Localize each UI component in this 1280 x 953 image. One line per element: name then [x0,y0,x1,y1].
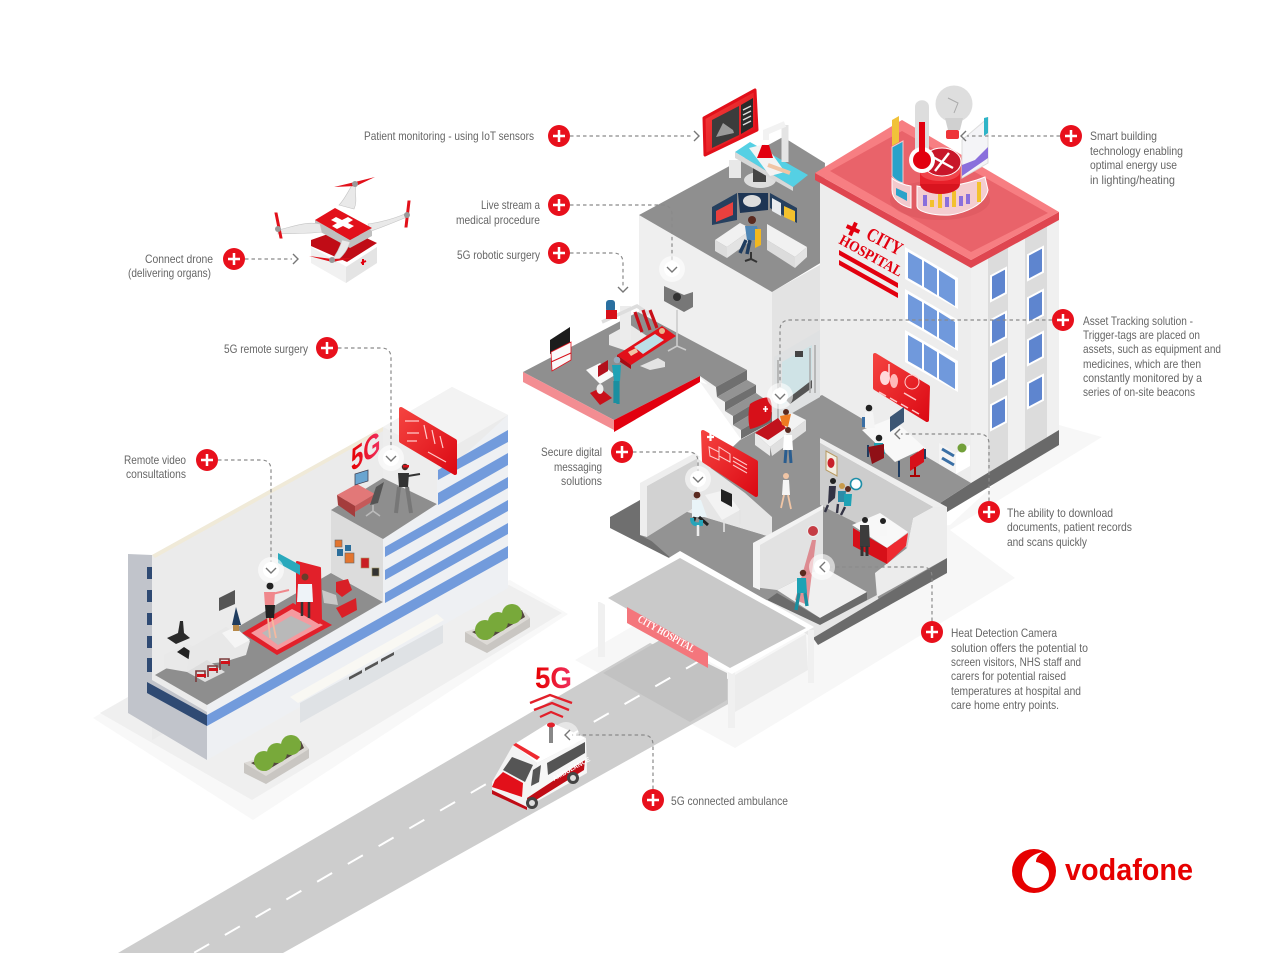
rooftop smart building display [890,100,990,220]
ambulance lettering: AMBULANCE [552,756,592,783]
reception desk [852,513,908,564]
5G ambulance signal: 5G [535,662,572,695]
monitor on stand [664,286,693,351]
callout: smart building: Smart building [1090,130,1157,143]
facade with blue stripes [207,415,508,760]
doctor by the bed [783,427,793,463]
monitoring tablet [704,90,757,155]
hospital name: CITY [863,224,906,260]
messaging doctor [692,492,708,536]
desk and chair [337,470,384,517]
hospital name: HOSPITAL [836,233,905,280]
white cross [331,217,354,229]
waiting patients [825,478,852,515]
left end wall [128,554,207,760]
operating lamp and console [602,300,657,352]
receptionist and visitor [860,517,887,556]
callout: asset tracking: constantly monitored by a [1083,372,1202,385]
potted plant [232,607,241,631]
antenna [549,726,553,743]
callout: remote surgery [224,337,404,471]
red chair [910,448,924,476]
hospital tower block [639,137,825,445]
canopy legs [598,602,814,728]
callout: connect drone [128,248,298,280]
left face windows [905,247,958,392]
callout: heat detection: screen visitors, NHS staff and [951,656,1081,669]
upper floor [331,478,437,539]
vodafone logo [1012,849,1193,893]
callout: asset tracking: series of on-site beacons [1083,386,1195,399]
left face [820,180,971,490]
wall scan picture [219,590,235,611]
callout: asset tracking: medicines, which are then [1083,358,1201,371]
hospital name [836,220,906,298]
callout: smart building: optimal energy use [1090,159,1177,172]
callout: connected ambulance: 5G connected ambulance [671,795,788,808]
panel: records [875,355,928,420]
remote doctor on phone screen [278,553,321,623]
ground: hospital plot [575,425,1102,748]
wheels [526,797,538,809]
camera wall [753,505,823,590]
bonnet [492,772,523,797]
patient bed [755,409,806,456]
road [118,634,808,953]
navy band [147,682,207,726]
callout: live stream [456,194,685,282]
callout: heat detection: solution offers the potential to [951,642,1088,655]
callout: download documents [895,429,1132,549]
kitchen [164,621,250,682]
entry step [777,567,867,618]
inner block [331,510,383,602]
callout: robotic surgery: 5G robotic surgery [457,249,540,262]
tower right face [772,262,825,445]
callout: connect drone: (delivering organs) [128,267,211,280]
stairs underside [700,382,741,438]
callout: video consultations [124,449,284,583]
elevator [774,330,820,423]
light bulb [936,86,972,139]
doctor at desk [862,405,925,477]
callout: download documents: and scans quickly [1007,536,1087,549]
callout: secure messaging [541,441,711,492]
surgical bed [617,326,676,370]
callout: live stream: Live stream a [481,199,540,212]
front plinth left [610,500,680,560]
side window [547,742,585,775]
wall pictures [335,540,379,576]
visitor under camera [796,570,807,610]
base [940,430,1059,512]
rug [242,603,332,655]
control room operator [740,216,761,262]
callout: download documents: The ability to download [1007,507,1113,520]
city hospital sign: CITY HOSPITAL [636,614,697,655]
callout: robotic surgery [457,242,628,292]
shelf [939,443,970,474]
medical box [311,247,377,283]
callout: asset tracking: assets, such as equipment and [1083,343,1221,356]
end wall windows [147,567,152,672]
body [527,738,587,807]
vodafone logo: vodafone [1065,852,1193,887]
bus shelter [290,614,444,723]
drone [275,177,410,283]
left building [128,387,508,760]
control room displays [712,193,797,225]
blood bag on wall [748,397,772,429]
planter [465,604,530,653]
reception floor [777,507,907,618]
frame [315,220,372,248]
red edge [614,376,700,432]
right face [971,212,1059,483]
callout: remote surgery: 5G remote surgery [224,343,308,356]
plinth [763,558,947,645]
callout: connect drone: Connect drone [145,253,213,266]
side stripe [527,760,585,805]
pink edge [523,372,614,430]
callout: smart building [961,125,1183,187]
callout: patient monitoring [364,125,699,147]
ground floor [610,330,971,645]
messaging desk [705,489,740,532]
callout: connected ambulance [553,722,788,811]
arms [278,185,407,262]
walking nurse [781,473,791,509]
callout: video consultations: Remote video [124,454,186,467]
callout: patient monitoring: Patient monitoring - using IoT sensors [364,130,534,143]
callout: smart building: in lighting/heating [1090,174,1175,187]
patient figure [264,582,289,638]
light bar [513,743,540,760]
reception wall return [875,507,947,597]
callout: video consultations: consultations [126,468,186,481]
red sofas and table [322,579,357,618]
operating table and robot arm [729,124,808,191]
panel: scan data [401,409,455,473]
planter [244,735,309,784]
5G sign: 5G [351,422,381,479]
main building [815,86,1059,512]
callout: heat detection: temperatures at hospital and [951,685,1081,698]
cart with screen [550,327,571,371]
surgery room equipment [550,286,693,405]
callout: secure messaging: messaging [554,461,602,474]
upper floor [639,137,825,292]
patient at desk [868,435,885,464]
callout: asset tracking [767,309,1221,409]
windscreen [503,757,533,782]
thermal camera beam [795,526,818,605]
5G ambulance signal [530,662,572,717]
back wall [152,387,508,740]
callout: heat detection: Heat Detection Camera [951,627,1057,640]
hall wall pictures [826,451,862,490]
ground: left building plot [93,580,568,820]
callout: secure messaging: Secure digital [541,446,602,459]
callout: download documents: documents, patient records [1007,521,1132,534]
ambulance [492,722,592,810]
tower left face [639,215,772,445]
lower floor [155,573,383,705]
person in VR headset [396,464,420,513]
hall wall [820,438,947,548]
callout: live stream: medical procedure [456,214,540,227]
control desk [715,223,807,268]
callout: asset tracking: Trigger-tags are placed on [1083,329,1200,342]
callout: heat detection: carers for potential raised [951,670,1066,683]
roof [815,120,1059,268]
stairs [716,370,772,439]
entrance canopy [598,551,814,728]
wall: messaging room [640,453,772,537]
red top [315,208,372,240]
callout: heat detection: care home entry points. [951,699,1059,712]
surgery floor [523,312,772,439]
upper block top [383,387,508,456]
callout: secure messaging: solutions [561,475,602,488]
rotors [275,177,410,263]
messaging room floor [647,512,770,590]
right face windows [991,247,1043,430]
callout: heat detection [809,554,1088,712]
surgeon console and operator [586,357,621,405]
panel: messaging [703,432,756,495]
callout: asset tracking: Asset Tracking solution - [1083,315,1193,328]
callout: smart building: technology enabling [1090,145,1183,158]
